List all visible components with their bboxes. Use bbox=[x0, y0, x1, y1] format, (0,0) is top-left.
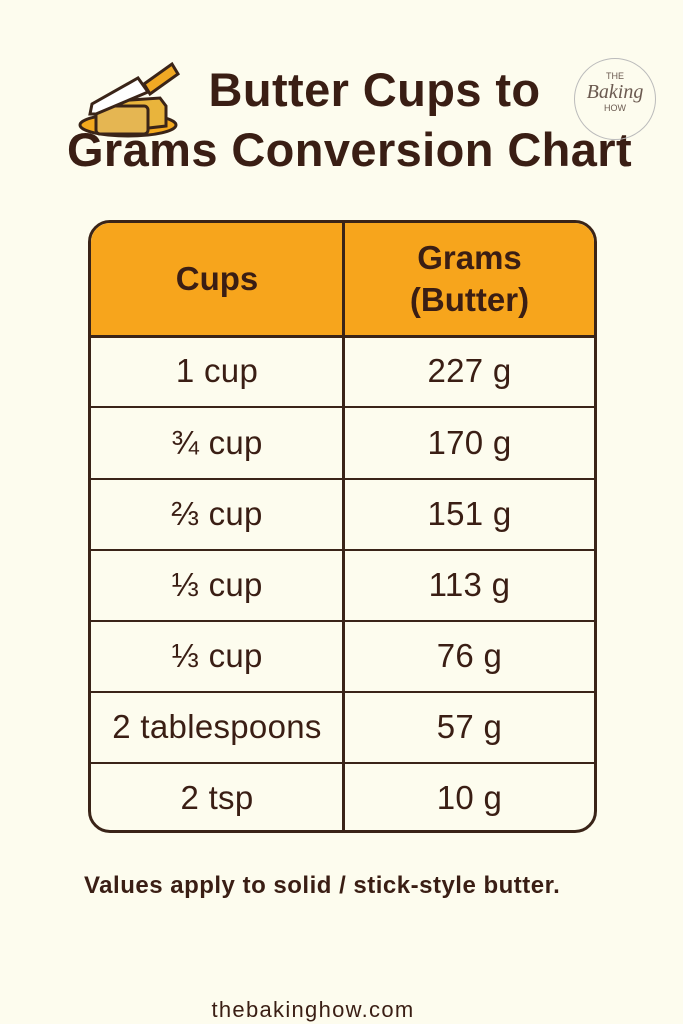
table: 170 g bbox=[427, 424, 512, 460]
title: Grams Conversion Chart bbox=[67, 123, 632, 176]
table: 2 tablespoons bbox=[112, 708, 322, 744]
table bbox=[88, 220, 597, 833]
title: Butter Cups to bbox=[209, 63, 540, 116]
logo: The Baking How: Baking bbox=[587, 81, 643, 103]
table: 57 g bbox=[437, 708, 502, 744]
table: 151 g bbox=[427, 494, 512, 532]
header row: Cups bbox=[176, 260, 258, 297]
header row bbox=[91, 223, 594, 338]
logo: The Baking How: HOW bbox=[604, 103, 626, 113]
website: thebakinghow.com bbox=[211, 997, 415, 1022]
table: ¾ cup bbox=[171, 424, 263, 460]
icon: butter and knife bbox=[78, 62, 180, 138]
table: 2 tsp bbox=[180, 778, 254, 816]
table: 76 g bbox=[437, 636, 502, 674]
title bbox=[67, 63, 632, 176]
table: ⅓ cup bbox=[171, 636, 263, 674]
table: ⅓ cup bbox=[171, 566, 263, 602]
logo: The Baking How: THE bbox=[606, 71, 624, 81]
rows bbox=[91, 335, 594, 408]
table: 113 g bbox=[429, 566, 510, 602]
rows: 1 cup bbox=[176, 352, 258, 388]
header row: Grams bbox=[417, 239, 522, 276]
header row: (Butter) bbox=[410, 281, 529, 318]
footnote: Values apply to solid / stick-style butter. bbox=[84, 872, 560, 899]
rows: 227 g bbox=[427, 352, 512, 388]
table: ⅔ cup bbox=[171, 494, 263, 532]
table: 10 g bbox=[437, 778, 502, 816]
logo: The Baking How bbox=[574, 58, 656, 140]
